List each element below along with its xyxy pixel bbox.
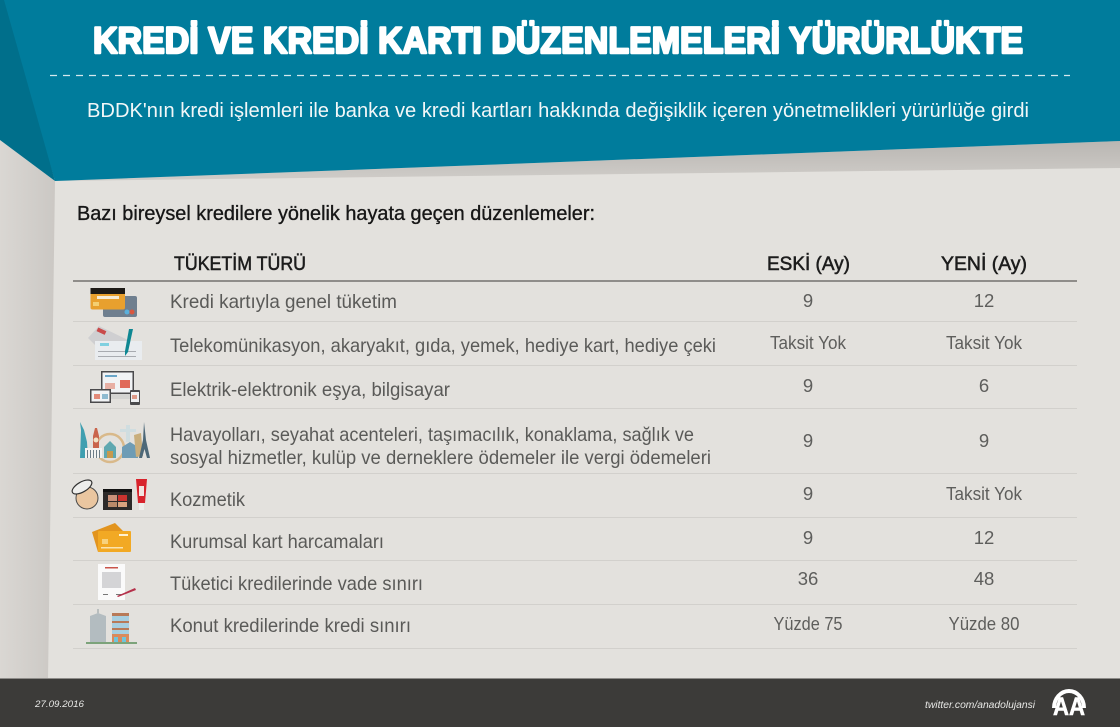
row: havayolları: 9 — [803, 430, 813, 451]
row: konut kredileri: Yüzde 80 — [948, 613, 1020, 634]
row: konut kredileri — [86, 609, 1020, 644]
row: telekomünikasyon — [88, 326, 1023, 360]
subtitle: BDDK'nın kredi işlemleri ile banka ve kredi kartları hakkında değişiklik içeren yönetmelikleri yürürlüğe girdi — [87, 100, 1029, 122]
table header: TÜKETİM TÜRÜ — [174, 252, 306, 275]
row: tüketici kredileri: 36 — [798, 568, 818, 589]
footer bar — [0, 678, 1120, 727]
table header: YENİ (Ay) — [941, 252, 1027, 275]
section heading: Bazı bireysel kredilere yönelik hayata geçen düzenlemeler: — [77, 202, 595, 225]
table header — [73, 252, 1077, 282]
twitter handle: twitter.com/anadolujansi — [925, 700, 1036, 711]
row: kozmetik: Taksit Yok — [946, 483, 1023, 504]
row: kredi kartı — [90, 288, 994, 317]
row: elektrik-elektronik: 6 — [979, 375, 989, 396]
header banner — [0, 0, 1120, 181]
row: kozmetik: Kozmetik — [170, 489, 245, 511]
row: havayolları: Havayolları, seyahat acenteleri, taşımacılık, konaklama, sağlık ve — [170, 424, 694, 446]
row: tüketici kredileri: Tüketici kredilerinde vade sınırı — [170, 573, 423, 595]
icon: cosmetics — [70, 477, 147, 510]
row: elektrik-elektronik: Elektrik-elektronik eşya, bilgisayar — [170, 379, 450, 401]
row: elektrik-elektronik: 9 — [803, 375, 813, 396]
row: kredi kartı: 12 — [974, 290, 994, 311]
date: 27.09.2016 — [34, 699, 85, 710]
title: KREDİ VE KREDİ KARTI DÜZENLEMELERİ YÜRÜRLÜKTE — [93, 20, 1023, 61]
row: kredi kartı: 9 — [803, 290, 813, 311]
icon: credit cards — [90, 288, 137, 317]
row: kurumsal kart: 9 — [803, 527, 813, 548]
icon: world landmarks — [80, 422, 150, 462]
icon: check and pen — [88, 326, 142, 360]
row: konut kredileri: Konut kredilerinde kredi sınırı — [170, 615, 411, 637]
row: havayolları: sosyal hizmetler, kulüp ve derneklere ödemeler ile vergi ödemeleri — [170, 447, 711, 469]
table — [70, 252, 1077, 648]
icon: contract document — [98, 564, 136, 600]
row: kozmetik — [70, 477, 1023, 511]
row: kurumsal kart — [92, 523, 994, 553]
row: tüketici kredileri: 48 — [974, 568, 994, 589]
icon: electronic devices — [90, 371, 140, 405]
row: telekomünikasyon: Taksit Yok — [770, 332, 847, 353]
row: konut kredileri: Yüzde 75 — [774, 613, 842, 634]
row: elektrik-elektronik — [90, 371, 989, 405]
logo: Anadolu Agency: AA — [1053, 693, 1085, 721]
row: kurumsal kart: 12 — [974, 527, 994, 548]
table header: ESKİ (Ay) — [767, 252, 850, 275]
row: kredi kartı: Kredi kartıyla genel tüketim — [170, 291, 397, 313]
row: telekomünikasyon: Telekomünikasyon, akaryakıt, gıda, yemek, hediye kart, hediye çeki — [170, 335, 716, 357]
row: telekomünikasyon: Taksit Yok — [946, 332, 1023, 353]
row: tüketici kredileri — [98, 564, 994, 600]
row: havayolları: 9 — [979, 430, 989, 451]
row: havayolları — [80, 422, 989, 469]
icon: corporate cards — [92, 523, 131, 552]
row: kurumsal kart: Kurumsal kart harcamaları — [170, 531, 384, 553]
row: kozmetik: 9 — [803, 483, 813, 504]
icon: buildings — [86, 609, 137, 644]
